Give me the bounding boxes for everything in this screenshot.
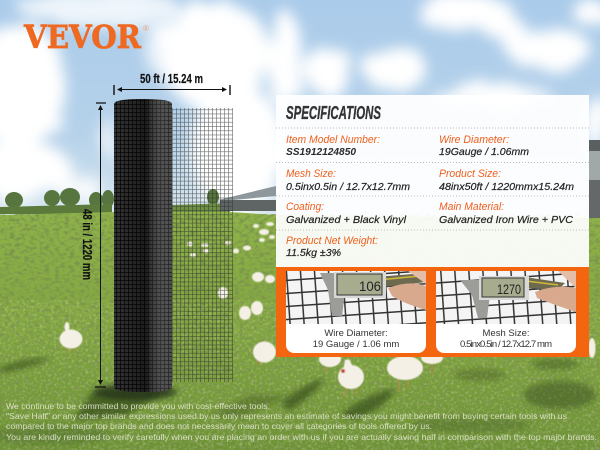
width dimension arrow xyxy=(114,85,230,95)
roll shadow xyxy=(93,384,177,400)
spec: product net weight xyxy=(286,235,378,259)
disclaimer text: We continue to be committed to provide you with cost-effective tools. xyxy=(6,401,270,411)
caption: mesh size xyxy=(460,328,552,350)
spec: mesh size xyxy=(286,168,410,193)
spec: wire diameter xyxy=(439,134,529,158)
height dimension arrow xyxy=(95,103,106,387)
spec: coating: Coating: xyxy=(286,201,324,213)
caption: mesh size: 0.5inx0.5in / 12.7x12.7 mm xyxy=(460,339,552,350)
panel: specifications xyxy=(276,95,589,267)
spec: product size xyxy=(439,168,574,193)
spec: mesh size: Mesh Size: xyxy=(286,168,336,180)
caption: wire diameter xyxy=(313,328,399,350)
chickens in field xyxy=(60,222,596,397)
caption: wire diameter: Wire Diameter: xyxy=(324,328,388,339)
spec: mesh size: 0.5inx0.5in / 12.7x12.7mm xyxy=(286,181,410,193)
spec: item model number: Item Model Number: xyxy=(286,134,380,146)
farm building right of panel xyxy=(589,140,600,218)
spec: main material: Main Material: xyxy=(439,201,504,213)
spec: product net weight: 11.5kg ±3% xyxy=(286,247,341,259)
photo: caliper on wire mesh: 1270 xyxy=(497,281,521,297)
spec: coating xyxy=(286,201,407,226)
disclaimer text: You are kindly reminded to verify carefully when you are placing an order with us if you are actually saving half in comparison with the top major brands. xyxy=(6,432,597,442)
shadows on grass xyxy=(0,358,596,445)
width label: 50 ft / 15.24 m xyxy=(140,71,203,86)
caption: mesh size: Mesh Size: xyxy=(482,328,530,339)
grass field xyxy=(0,212,600,450)
unrolled flat wire mesh xyxy=(172,108,233,382)
panel: orange measurement strip xyxy=(276,267,589,357)
wire mesh roll xyxy=(114,99,172,392)
spec: item model number xyxy=(286,134,380,158)
spec: product size: 48inx50ft / 1220mmx15.24m xyxy=(439,181,574,193)
spec: product net weight: Product Net Weight: xyxy=(286,235,378,247)
farm building left of panel xyxy=(218,186,276,211)
spec: main material xyxy=(439,201,573,226)
spec: product size: Product Size: xyxy=(439,168,501,180)
spec: wire diameter: Wire Diameter: xyxy=(439,134,509,146)
photo: caliper on wire mesh: 106 xyxy=(359,278,381,294)
card: mesh size measurement xyxy=(436,271,576,353)
sky with clouds xyxy=(0,0,600,225)
spec: coating: Galvanized + Black Vinyl xyxy=(286,214,407,226)
height label: 48 in / 1220 mm xyxy=(80,209,95,280)
spec: item model number: SS1912124850 xyxy=(286,146,356,158)
disclaimer text xyxy=(6,401,597,442)
disclaimer text: "Save Half" or any other similar expressions used by us only represents an estimate of savings you might benefit from buying certain tools with us xyxy=(6,411,567,421)
heading: specifications: SPECIFICATIONS xyxy=(286,103,381,123)
VEVOR logo: ® xyxy=(143,24,149,33)
card: wire diameter measurement xyxy=(286,271,426,353)
tree line and hedge xyxy=(0,188,230,214)
spec: main material: Galvanized Iron Wire + PVC xyxy=(439,214,573,226)
caption: wire diameter: 19 Gauge / 1.06 mm xyxy=(313,339,399,350)
VEVOR logo: VEVOR xyxy=(23,18,141,56)
spec: wire diameter: 19Gauge / 1.06mm xyxy=(439,146,529,158)
disclaimer text: compared to the major top brands and does not necessarily mean to cover all categories of tools offered by us. xyxy=(6,421,432,431)
